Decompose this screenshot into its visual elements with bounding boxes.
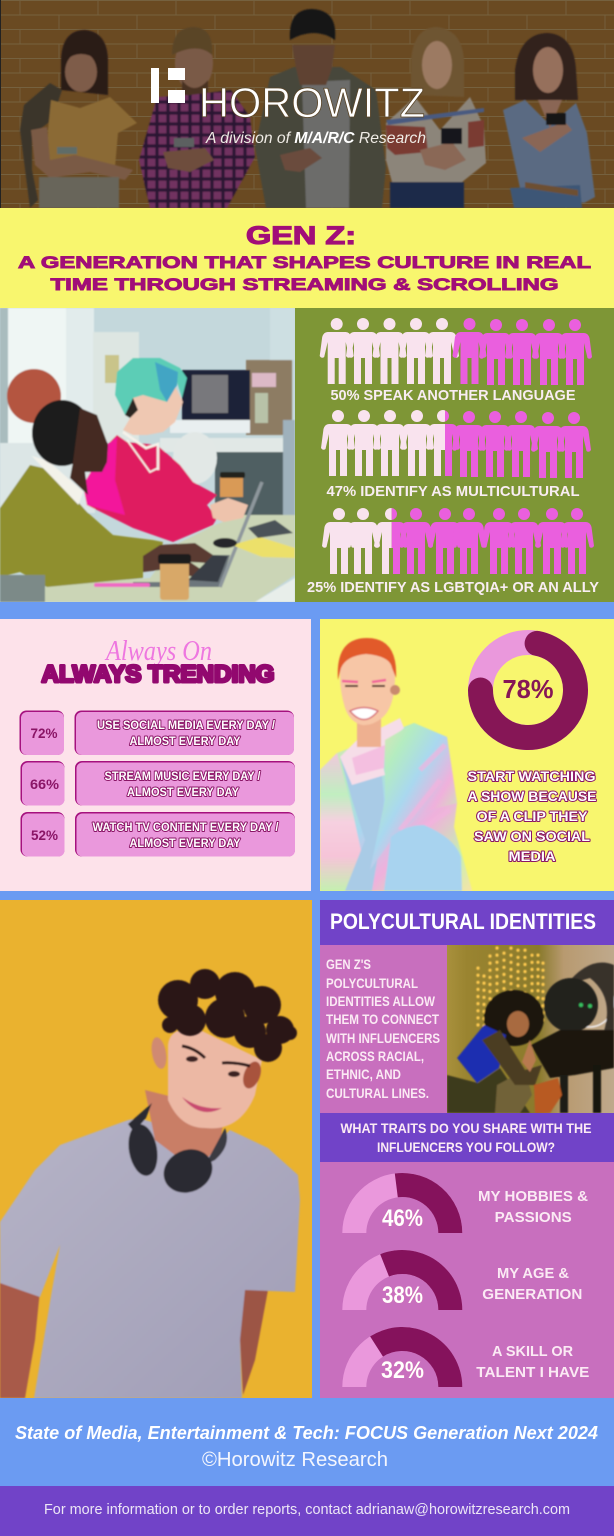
body text block: GEN Z'S	[326, 957, 371, 972]
body text block: POLYCULTURAL	[326, 976, 418, 991]
pictogram row: 50% speak another language	[320, 318, 592, 404]
source line: ©Horowitz Research	[202, 1449, 388, 1471]
body text block	[320, 945, 447, 1113]
footer bar	[0, 1486, 614, 1536]
gauge: 38% age and generation: GENERATION	[482, 1286, 582, 1303]
gauge: 38% age and generation: MY AGE &	[497, 1265, 569, 1282]
body text block: ETHNIC, AND	[326, 1067, 401, 1082]
logo mark	[151, 68, 185, 103]
stat row: 52% watch TV: WATCH TV CONTENT EVERY DAY /	[92, 820, 279, 834]
caption	[468, 768, 596, 864]
panel: always on, always trending	[0, 619, 311, 891]
gauge: 38% age and generation	[342, 1250, 582, 1310]
stat row: 66% stream music	[20, 761, 295, 806]
pictogram row: 25% identify as LGBTQIA+ or an ally: 25% IDENTIFY AS LGBTQIA+ OR AN ALLY	[307, 579, 599, 596]
gauge: 32% skill or talent: A SKILL OR	[492, 1343, 573, 1360]
body text block: THEM TO CONNECT	[326, 1012, 440, 1027]
stat row: 52% watch TV	[20, 812, 295, 856]
stat row: 72% social media: USE SOCIAL MEDIA EVERY DAY /	[97, 718, 276, 732]
stat row: 52% watch TV: ALMOST EVERY DAY	[130, 836, 240, 850]
pictogram row: 50% speak another language: 50% SPEAK ANOTHER LANGUAGE	[330, 387, 576, 404]
title: Gen Z: GEN Z:	[246, 222, 356, 250]
question banner: WHAT TRAITS DO YOU SHARE WITH THE	[340, 1120, 592, 1136]
caption: SAW ON SOCIAL	[474, 828, 590, 844]
logo wordmark: HOROWITZ	[199, 79, 425, 126]
stat row: 72% social media: ALMOST EVERY DAY	[130, 734, 240, 748]
donut chart	[480, 642, 576, 738]
caption: OF A CLIP THEY	[476, 808, 588, 824]
caption: MEDIA	[508, 848, 556, 864]
body text block: ACROSS RACIAL,	[326, 1049, 424, 1064]
stat row: 66% stream music: ALMOST EVERY DAY	[127, 785, 239, 799]
subtitle line 1: A GENERATION THAT SHAPES CULTURE IN REAL	[18, 254, 591, 272]
stat row: 52% watch TV: 52%	[31, 827, 59, 843]
pictogram row: 25% identify as LGBTQIA+ or an ally	[307, 508, 599, 596]
caption: A SHOW BECAUSE	[468, 788, 596, 804]
photo: influencer filming with ring light	[447, 945, 614, 1113]
title band	[0, 208, 614, 308]
photo: smiling person in rainbow cardigan	[320, 638, 472, 891]
gauge: 46% hobbies and passions	[342, 1173, 588, 1233]
panel: 78% donut	[320, 619, 614, 891]
gauge: 32% skill or talent: TALENT I HAVE	[476, 1364, 589, 1381]
gauge: 32% skill or talent	[342, 1327, 589, 1387]
script heading: Always On	[104, 636, 212, 667]
panel: polycultural identities	[320, 900, 614, 1398]
source line	[15, 1423, 598, 1471]
bold heading: ALWAYS TRENDING	[42, 661, 274, 688]
question banner: INFLUENCERS YOU FOLLOW?	[377, 1139, 555, 1155]
gauge: 46% hobbies and passions: MY HOBBIES &	[478, 1188, 588, 1205]
logo tagline: A division of M/A/R/C Research	[205, 130, 426, 147]
stat row: 72% social media	[20, 710, 294, 755]
stat row: 66% stream music: STREAM MUSIC EVERY DAY /	[104, 769, 261, 783]
stat row: 72% social media: 72%	[30, 725, 58, 741]
gauge: 32% skill or talent: 32%	[381, 1357, 424, 1384]
question banner	[320, 1113, 614, 1162]
panel: demographic pictograms	[295, 308, 614, 602]
donut chart: 78%	[502, 674, 554, 704]
body text block: CULTURAL LINES.	[326, 1086, 429, 1101]
pictogram row: 47% identify as multicultural	[321, 410, 591, 500]
source line: State of Media, Entertainment & Tech: FOCUS Generation Next 2024	[15, 1423, 598, 1443]
caption: START WATCHING	[468, 768, 596, 784]
header photo: five young people on phones	[0, 0, 614, 208]
stat row: 66% stream music: 66%	[30, 776, 60, 792]
body text block: WITH INFLUENCERS	[326, 1031, 440, 1046]
logo	[151, 68, 426, 147]
gauge: 46% hobbies and passions: 46%	[382, 1205, 423, 1232]
pictogram row: 47% identify as multicultural: 47% IDENTIFY AS MULTICULTURAL	[326, 483, 580, 500]
photo: two coworkers at a laptop	[0, 308, 295, 602]
traits chart panel	[320, 1162, 614, 1398]
photo: young man with headphones	[0, 900, 312, 1398]
gauge: 38% age and generation: 38%	[382, 1282, 423, 1309]
subtitle line 2: TIME THROUGH STREAMING & SCROLLING	[50, 276, 558, 294]
body text block: IDENTITIES ALLOW	[326, 994, 435, 1009]
footer bar: For more information or to order reports, contact adrianaw@horowitzresearch.com	[44, 1502, 570, 1518]
gauge: 46% hobbies and passions: PASSIONS	[495, 1209, 572, 1226]
